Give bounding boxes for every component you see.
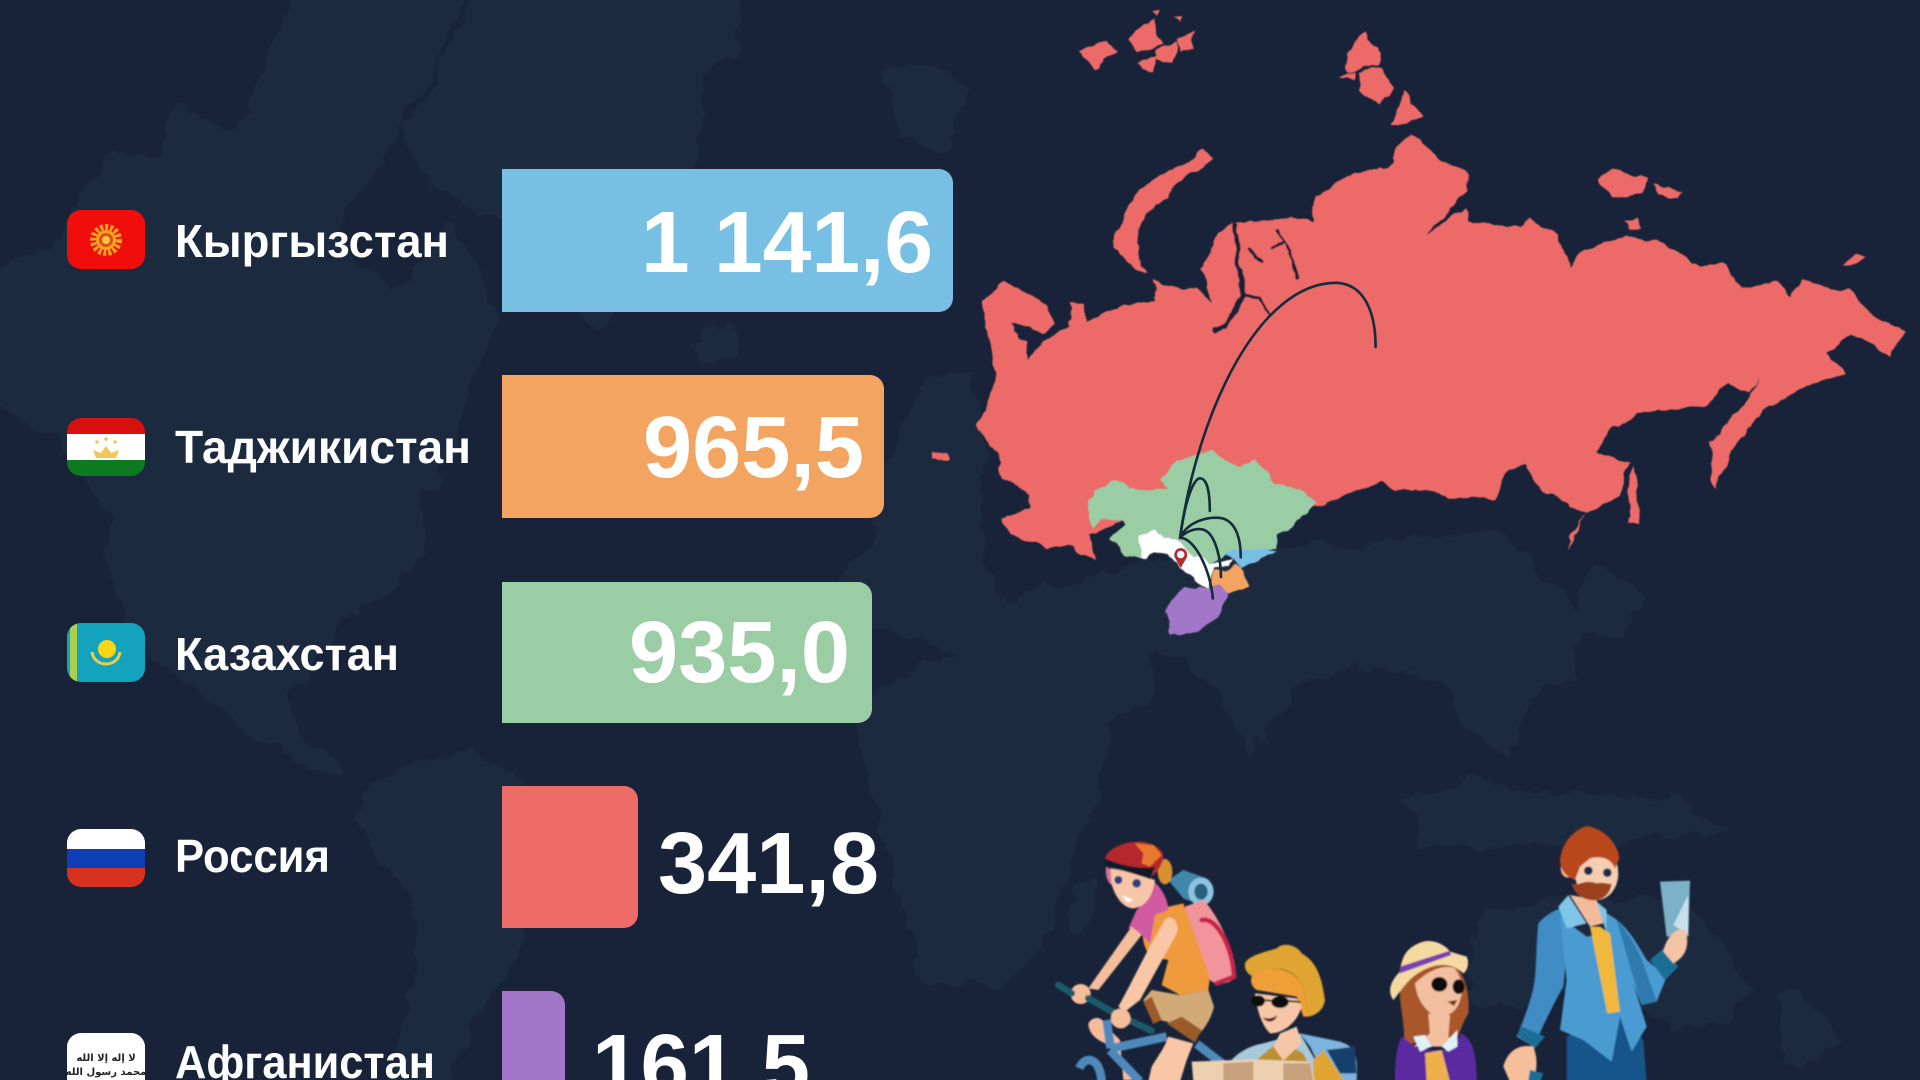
Kyrgyzstan bbox=[1223, 548, 1278, 570]
value: 965,5 bbox=[643, 399, 864, 496]
Uzbekistan bbox=[1140, 530, 1235, 587]
bar bbox=[502, 582, 872, 723]
flag: Afghanistan bbox=[66, 1033, 146, 1080]
Kazakhstan bbox=[1087, 450, 1317, 564]
row: Казахстан bbox=[67, 582, 872, 723]
value: 1 141,6 bbox=[641, 194, 933, 291]
value: 935,0 bbox=[629, 604, 850, 701]
bar bbox=[502, 169, 953, 312]
illustration: travellers bbox=[1058, 826, 1690, 1080]
flag: Kazakhstan bbox=[67, 623, 145, 682]
map: Russia with islands bbox=[931, 10, 1907, 560]
flag: Russia bbox=[67, 829, 145, 887]
row: Россия bbox=[67, 786, 879, 928]
row: Кыргызстан bbox=[67, 169, 953, 312]
bar bbox=[502, 786, 638, 928]
flag: Tajikistan bbox=[67, 418, 145, 476]
person: man with map bbox=[1192, 945, 1357, 1080]
label: Кыргызстан bbox=[175, 215, 449, 267]
row: Таджикистан bbox=[67, 375, 884, 518]
map: Central Asia countries bbox=[1087, 450, 1317, 635]
flag: Afghanistan: لا إله إلا الله bbox=[76, 1053, 136, 1064]
flag: Kyrgyzstan bbox=[67, 210, 145, 269]
map: route arcs bbox=[1180, 283, 1376, 599]
Afghanistan bbox=[1164, 583, 1228, 635]
Tajikistan bbox=[1210, 567, 1248, 591]
label: Казахстан bbox=[175, 628, 399, 680]
icon: map pin bbox=[1174, 548, 1187, 568]
person: cyclist bbox=[1058, 842, 1236, 1080]
bar bbox=[502, 375, 884, 518]
flag: Afghanistan: محمد رسول الله bbox=[66, 1067, 146, 1078]
value: 341,8 bbox=[658, 815, 879, 912]
bar bbox=[502, 991, 565, 1080]
label: Россия bbox=[175, 830, 330, 882]
row: Афганистан bbox=[66, 991, 810, 1080]
person: bearded man with phone bbox=[1503, 826, 1690, 1080]
label: Таджикистан bbox=[175, 421, 471, 473]
person: woman with hat bbox=[1390, 941, 1477, 1080]
